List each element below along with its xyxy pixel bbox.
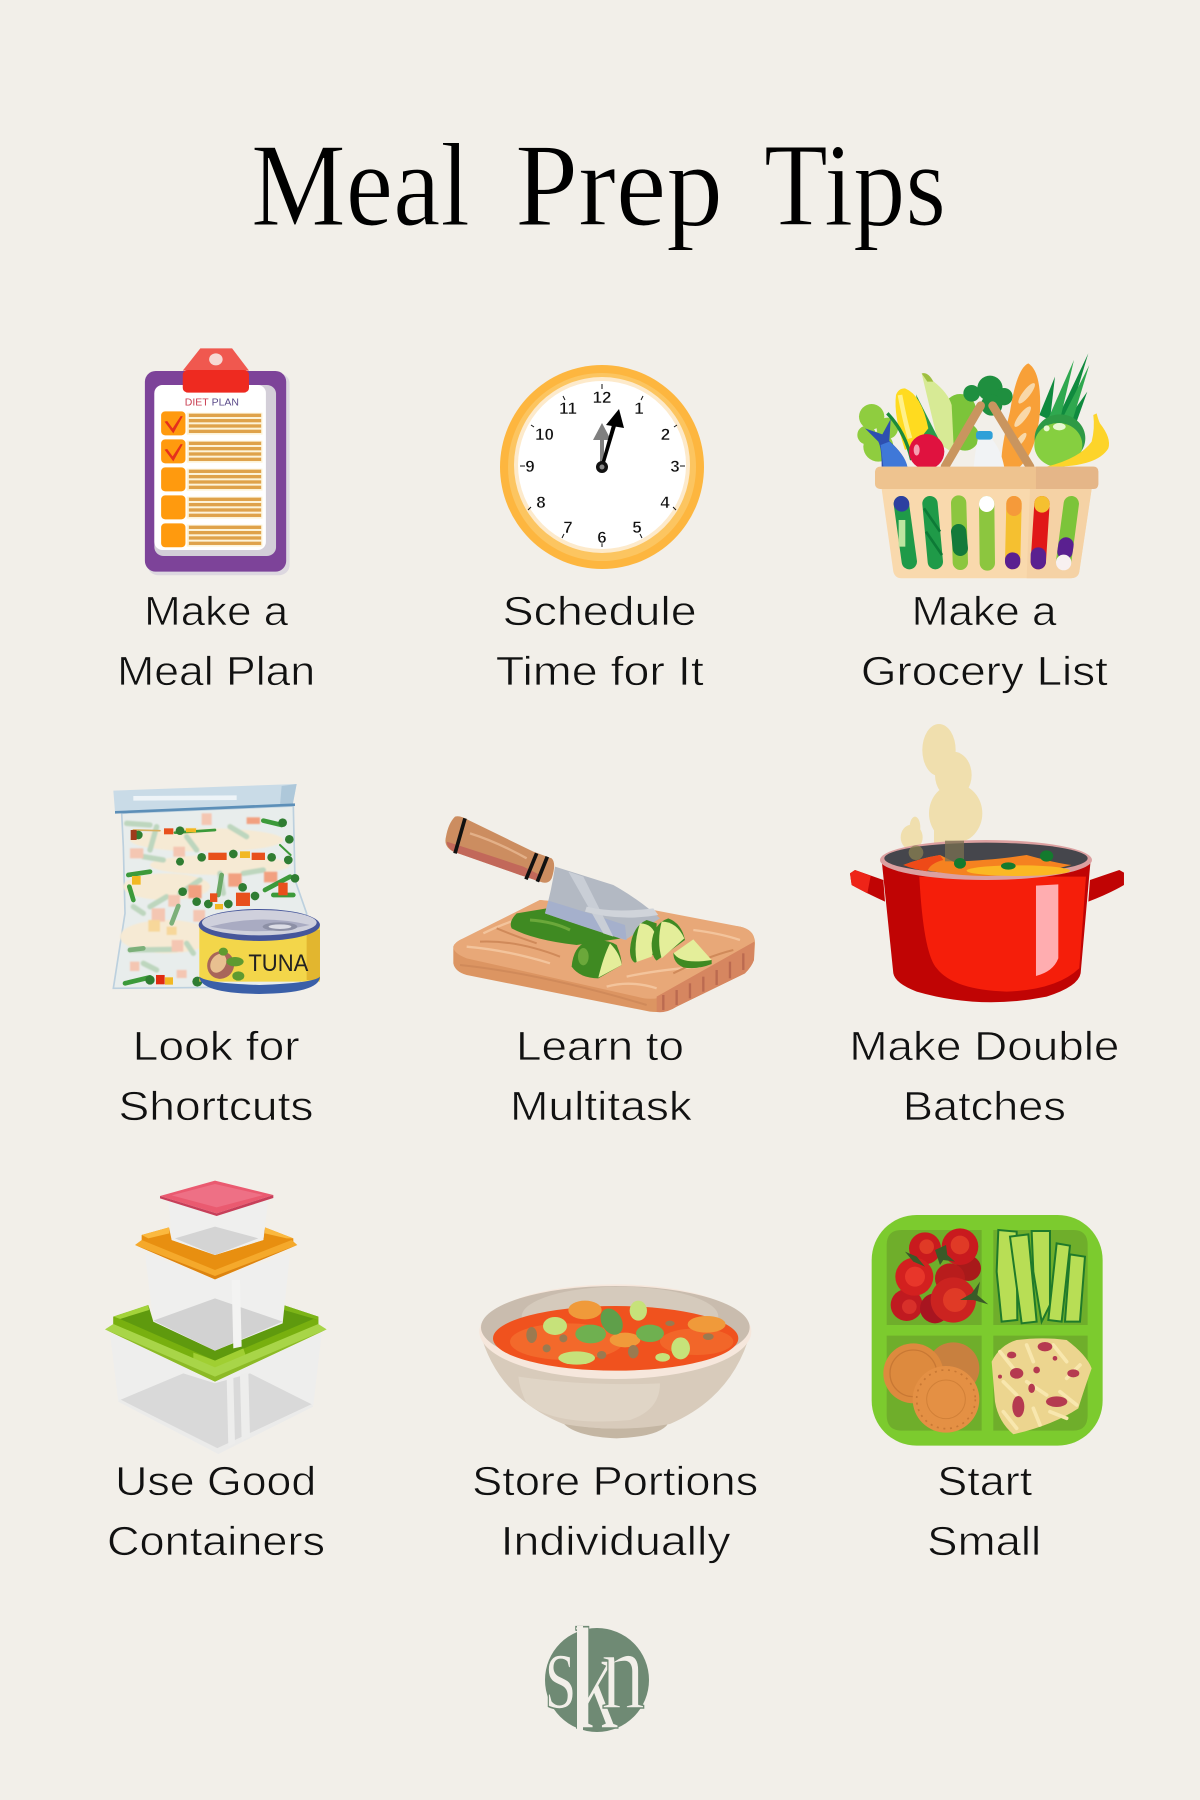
label: Schedule Time for It	[496, 588, 704, 694]
label: Look for Shortcuts: Look for	[133, 1023, 300, 1069]
label: Make a Meal Plan: Make a	[144, 588, 288, 634]
label: Use Good Containers	[107, 1458, 325, 1564]
icon: grocery basket	[857, 353, 1109, 578]
label: Learn to Multitask	[510, 1023, 693, 1129]
icon: clipboard diet plan: DIET PLAN	[185, 398, 239, 409]
icon: green lunch tray	[872, 1215, 1103, 1446]
label: Make Double Batches: Batches	[903, 1083, 1066, 1129]
icon: wall clock: 6	[597, 528, 607, 547]
label: Make a Grocery List	[861, 588, 1109, 694]
label: Learn to Multitask: Learn to	[516, 1023, 684, 1069]
label: Schedule Time for It: Schedule	[503, 588, 697, 634]
icon: wall clock: 9	[525, 457, 535, 476]
icon: freezer bag and tuna can	[113, 784, 320, 994]
label: Make a Grocery List: Make a	[912, 588, 1057, 634]
label: Store Portions Individually: Store Portions	[472, 1458, 758, 1504]
label: Start Small: Start	[937, 1458, 1033, 1504]
icon: wall clock: 3	[670, 457, 680, 476]
icon: bowl of soup	[479, 1284, 751, 1438]
label: Store Portions Individually	[472, 1458, 758, 1564]
label: Schedule Time for It: Time for It	[496, 648, 704, 694]
icon: wall clock: 8	[536, 493, 546, 512]
label: Use Good Containers: Containers	[107, 1518, 325, 1564]
icon: wall clock: 1	[634, 399, 644, 418]
icon: knife and cutting board	[445, 816, 755, 1012]
icon: wall clock: 2	[661, 425, 670, 444]
icon: wall clock	[500, 365, 704, 569]
label: Make a Meal Plan	[117, 588, 315, 694]
label: Start Small: Small	[927, 1518, 1041, 1564]
label: Store Portions Individually: Individually	[501, 1518, 731, 1564]
label: Make Double Batches: Make Double	[849, 1023, 1119, 1069]
label: Use Good Containers: Use Good	[115, 1458, 316, 1504]
icon: wall clock: 7	[563, 518, 573, 537]
label: Make a Meal Plan: Meal Plan	[117, 648, 315, 694]
label: Look for Shortcuts	[118, 1023, 314, 1129]
title: Tips	[764, 119, 946, 251]
label: Look for Shortcuts: Shortcuts	[118, 1083, 314, 1129]
icon: freezer bag and tuna can: TUNA	[248, 950, 308, 977]
label: Learn to Multitask: Multitask	[510, 1083, 693, 1129]
label: Start Small	[927, 1458, 1041, 1564]
logo: skn monogram: n	[601, 1609, 645, 1733]
icon: stacked containers	[105, 1181, 327, 1454]
icon: steaming red pot	[850, 724, 1124, 1002]
title: Prep	[515, 119, 723, 251]
title	[251, 119, 946, 251]
icon: wall clock: 10	[535, 425, 554, 444]
icon: wall clock: 12	[593, 388, 611, 407]
icon: wall clock: 4	[660, 493, 670, 512]
logo: skn monogram: k	[574, 1598, 618, 1760]
label: Make Double Batches	[849, 1023, 1119, 1129]
logo: skn monogram: s	[545, 1609, 576, 1733]
title: Meal	[251, 119, 470, 251]
icon: wall clock: 11	[559, 399, 577, 418]
icon: wall clock: 5	[632, 518, 642, 537]
label: Make a Grocery List: Grocery List	[861, 648, 1109, 694]
icon: clipboard diet plan	[145, 348, 290, 575]
